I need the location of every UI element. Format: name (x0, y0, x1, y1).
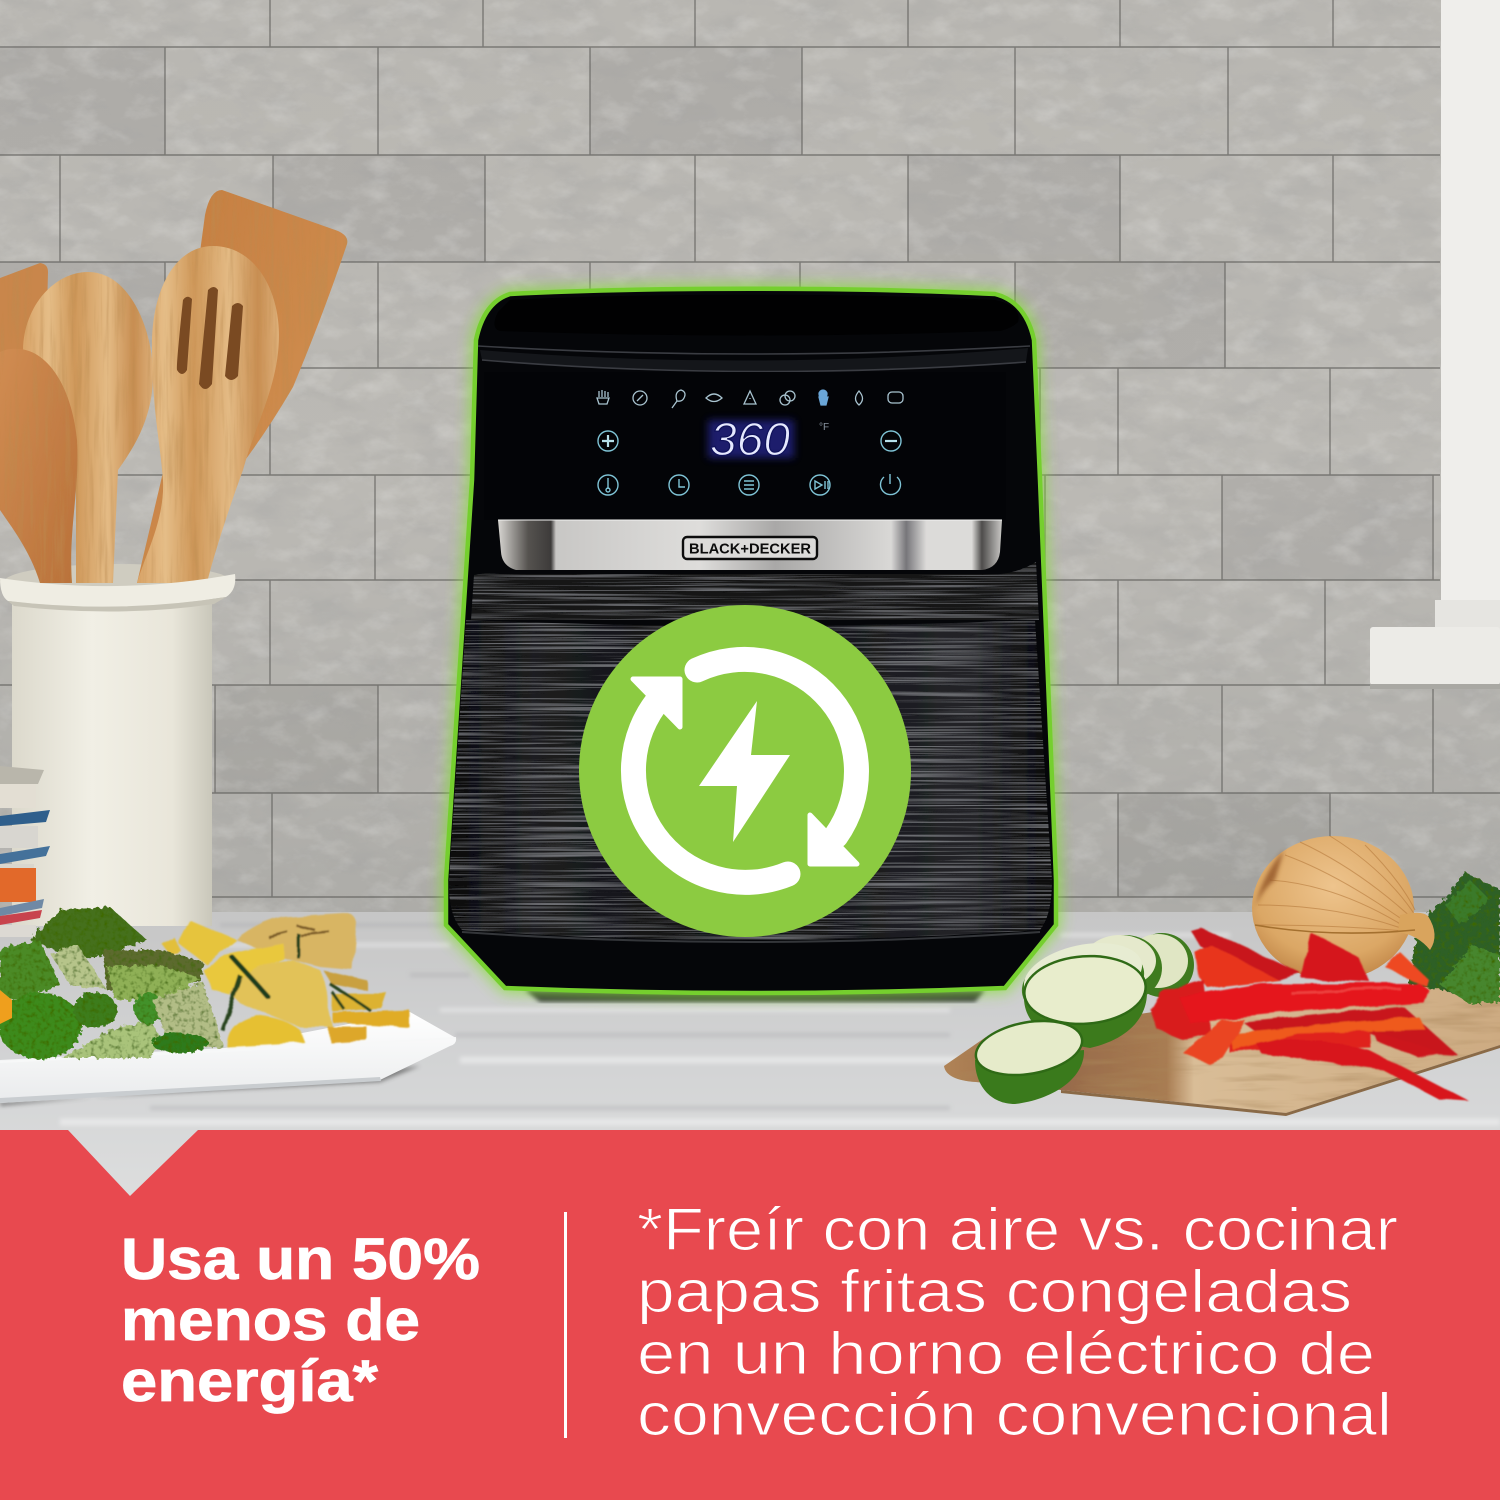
headline: 50% less energy (121, 1227, 480, 1414)
footnote text: papas fritas congeladas (637, 1258, 1352, 1325)
countertop (0, 912, 1500, 1202)
zucchini slices (970, 933, 1194, 1104)
lightning bolt (699, 701, 790, 842)
front beech spoon (0, 349, 77, 583)
touch buttons (598, 431, 901, 495)
footnote text: *Freír con aire vs. cocinar (637, 1196, 1398, 1263)
air fryer with green glow (446, 289, 1056, 1002)
steel handle (498, 520, 1002, 570)
red text panel (0, 1130, 1500, 1500)
headline: 50% less energy: Usa un 50% (121, 1227, 480, 1292)
squash (163, 913, 410, 1047)
headline: 50% less energy: menos de (121, 1288, 420, 1353)
shadow (0, 1066, 420, 1106)
plate of roasted vegetables (0, 907, 456, 1106)
basket drawer (449, 620, 1052, 940)
ceramic utensil cup (0, 574, 235, 926)
temperature display (708, 413, 829, 465)
outline (446, 289, 1056, 993)
onion (1252, 836, 1435, 980)
stack of books (0, 766, 50, 937)
cutting board (944, 985, 1500, 1116)
footnote text: convección convencional (637, 1381, 1392, 1448)
arrow arc lower left (633, 679, 788, 882)
parsley (1408, 872, 1500, 1004)
back small spatula (0, 263, 48, 352)
background: stone brick wall (0, 0, 1500, 915)
arrow arc upper right (697, 659, 857, 864)
cup back rim (4, 564, 232, 600)
top opening (494, 295, 1019, 336)
under shadow (525, 990, 985, 1002)
vertical divider (564, 1212, 567, 1438)
slotted spoon (137, 246, 279, 583)
temperature display: 360 (710, 413, 790, 465)
footnote text: en un horno eléctrico de (637, 1320, 1375, 1387)
red pepper strips (1151, 927, 1470, 1102)
energy recycle badge (579, 605, 911, 937)
food preset icons (597, 390, 903, 408)
footnote text (637, 1196, 1398, 1448)
bamboo spoon (23, 272, 153, 583)
temperature display: °F (819, 422, 829, 433)
window frame and sill (1370, 0, 1500, 689)
headline: 50% less energy: energía* (121, 1349, 378, 1414)
upper body band (471, 562, 1039, 620)
broccoli (0, 907, 224, 1059)
wooden utensils in cup (0, 190, 347, 600)
control panel (484, 372, 1006, 520)
white plate (0, 1012, 456, 1103)
glow (446, 289, 1056, 993)
wide spatula (137, 190, 347, 583)
brand badge: BLACK+DECKER (689, 540, 811, 558)
